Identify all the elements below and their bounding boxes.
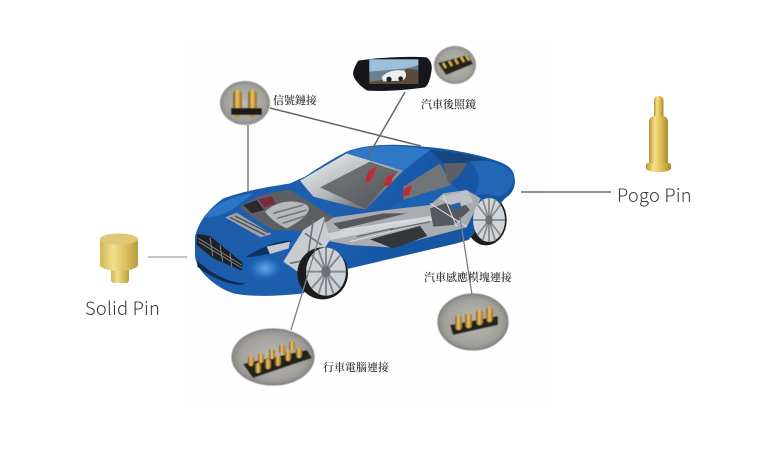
car body bbox=[195, 145, 515, 296]
engine bay bbox=[240, 190, 333, 231]
leader lines bbox=[248, 92, 472, 330]
front wheel bbox=[297, 247, 348, 299]
floor and drivetrain details bbox=[370, 226, 427, 249]
front suspension bbox=[283, 217, 330, 273]
callout: car computer connector bbox=[232, 329, 314, 385]
hood vent bbox=[225, 213, 272, 237]
headlight bbox=[245, 241, 292, 257]
front grille bbox=[197, 234, 243, 271]
car illustration bbox=[195, 145, 515, 299]
label: car sensor module connection: 汽車感應模塊連接 bbox=[424, 270, 512, 284]
label: signal connector: 信號鏈接 bbox=[273, 93, 317, 107]
connector line: solid pin bbox=[148, 256, 187, 258]
label: solid pin: Solid Pin bbox=[85, 295, 160, 321]
door skin bbox=[388, 185, 458, 212]
icon: solid pin bbox=[100, 234, 138, 283]
rear wheel tire bbox=[465, 195, 507, 245]
front body shine bbox=[247, 255, 283, 282]
rear fender shine bbox=[470, 161, 513, 197]
seats bbox=[365, 165, 377, 182]
hood shine bbox=[203, 193, 253, 218]
label: car computer connection: 行車電腦連接 bbox=[323, 360, 389, 374]
roof shine bbox=[347, 146, 430, 171]
icon: pogo pin bbox=[646, 96, 671, 172]
connector line: pogo pin bbox=[521, 191, 611, 193]
side glass bbox=[403, 163, 452, 200]
callout: signal connector bbox=[220, 81, 270, 125]
callout: rear-view mirror bbox=[353, 57, 432, 91]
callout: mirror connector bbox=[434, 46, 476, 84]
label: rear-view mirror: 汽車後照鏡 bbox=[421, 97, 476, 111]
chassis cutaway bbox=[313, 190, 481, 247]
lower intake bbox=[197, 261, 245, 285]
rear wheel bbox=[473, 198, 505, 242]
callout: sensor module connector bbox=[438, 294, 508, 350]
windshield bbox=[300, 153, 403, 210]
label: pogo pin: Pogo Pin bbox=[617, 182, 692, 208]
photo background panel bbox=[185, 40, 547, 410]
